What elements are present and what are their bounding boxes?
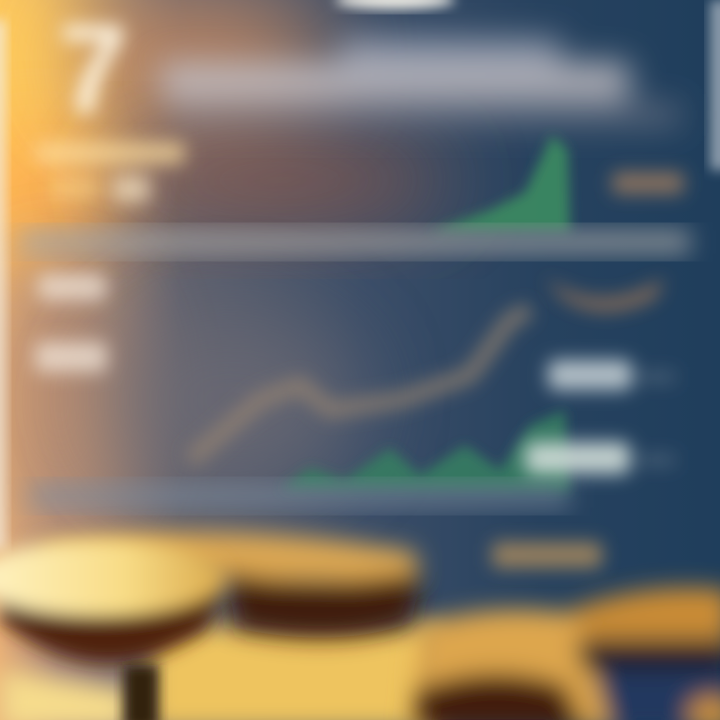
coin: back centre bbox=[40, 532, 420, 638]
heading text block bbox=[160, 38, 680, 126]
right value labels bbox=[492, 360, 675, 568]
coin: foreground base bbox=[0, 625, 440, 720]
heading numeral: 7 bbox=[58, 0, 128, 139]
gold coins bbox=[0, 532, 720, 720]
top area chart bbox=[430, 135, 570, 232]
coin: large front left bbox=[0, 540, 225, 663]
top right labels bbox=[545, 172, 684, 311]
left axis labels bbox=[35, 274, 107, 372]
coin: stem bbox=[124, 665, 158, 720]
bottom axis band bbox=[30, 484, 570, 508]
horizontal divider band bbox=[20, 230, 690, 254]
coin: right stack bbox=[410, 588, 720, 720]
line chart bbox=[190, 310, 530, 460]
subheading text block bbox=[35, 142, 185, 202]
bottom area chart bbox=[280, 410, 570, 492]
